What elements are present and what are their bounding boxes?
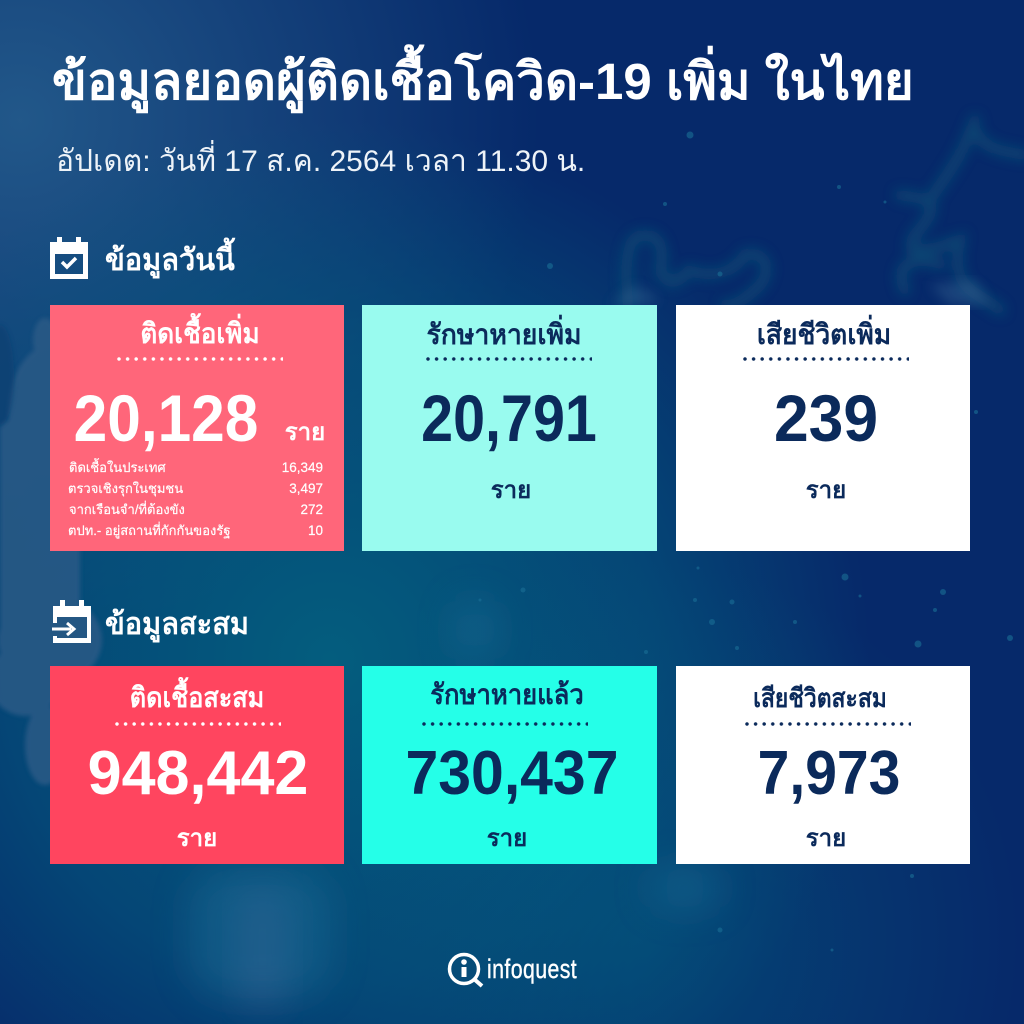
panel title: เสียชีวิตเพิ่ม: [756, 319, 891, 350]
breakdown list: 16,349: [282, 460, 323, 475]
panel title: เสียชีวิตสะสม: [753, 683, 887, 713]
big number: 7,973: [758, 739, 900, 808]
big number: 730,437: [406, 739, 618, 808]
breakdown list: [68, 458, 323, 539]
title: ข้อมูลยอดผู้ติดเชื้อโควิด-19 เพิ่ม ในไทย: [52, 53, 914, 110]
breakdown list: 10: [308, 523, 323, 538]
wordmark: infoquest: [487, 954, 577, 984]
unit: ราย: [285, 419, 325, 446]
big number: 239: [774, 381, 878, 455]
panel: new recoveries today: [362, 305, 657, 551]
panel title: ติดเชื้อสะสม: [129, 682, 264, 713]
panel: cumulative deaths: [676, 666, 970, 864]
breakdown list: ติดเชื้อในประเทศ: [69, 460, 166, 475]
big number: 20,128: [74, 381, 258, 455]
panel: cumulative infections: [50, 666, 344, 864]
icon: calendar arrow: [52, 600, 91, 643]
panel: new infections today: [50, 305, 344, 551]
icon: calendar check: [50, 237, 88, 279]
panel title: ติดเชื้อเพิ่ม: [140, 318, 260, 349]
breakdown list: 272: [300, 502, 323, 517]
breakdown list: 3,497: [289, 481, 323, 496]
breakdown list: ตปท.- อยู่สถานที่กักกันของรัฐ: [68, 523, 230, 538]
breakdown list: ตรวจเชิงรุกในชุมชน: [68, 481, 183, 496]
panel title: รักษาหายแล้ว: [430, 679, 584, 710]
panel: cumulative recoveries: [362, 666, 657, 864]
unit: ราย: [806, 825, 846, 852]
heading: cumulative data: ข้อมูลสะสม: [105, 608, 249, 641]
logo: infoquest: [448, 952, 577, 988]
unit: ราย: [177, 825, 217, 852]
heading: today's data: ข้อมูลวันนี้: [105, 244, 235, 277]
breakdown list: จากเรือนจำ/ที่ต้องขัง: [69, 502, 185, 517]
big number: 20,791: [421, 381, 596, 455]
unit: ราย: [806, 477, 846, 504]
left virus body: [0, 318, 116, 785]
right virus strands: [626, 120, 1024, 310]
unit: ราย: [487, 825, 527, 852]
icon: magnifier i: [448, 952, 484, 988]
unit: ราย: [491, 477, 531, 504]
panel title: รักษาหายเพิ่ม: [426, 319, 582, 350]
panel: new deaths today: [676, 305, 970, 551]
update date subtitle: อัปเดต: วันที่ 17 ส.ค. 2564 เวลา 11.30 น.: [56, 145, 585, 178]
big number: 948,442: [88, 739, 308, 808]
